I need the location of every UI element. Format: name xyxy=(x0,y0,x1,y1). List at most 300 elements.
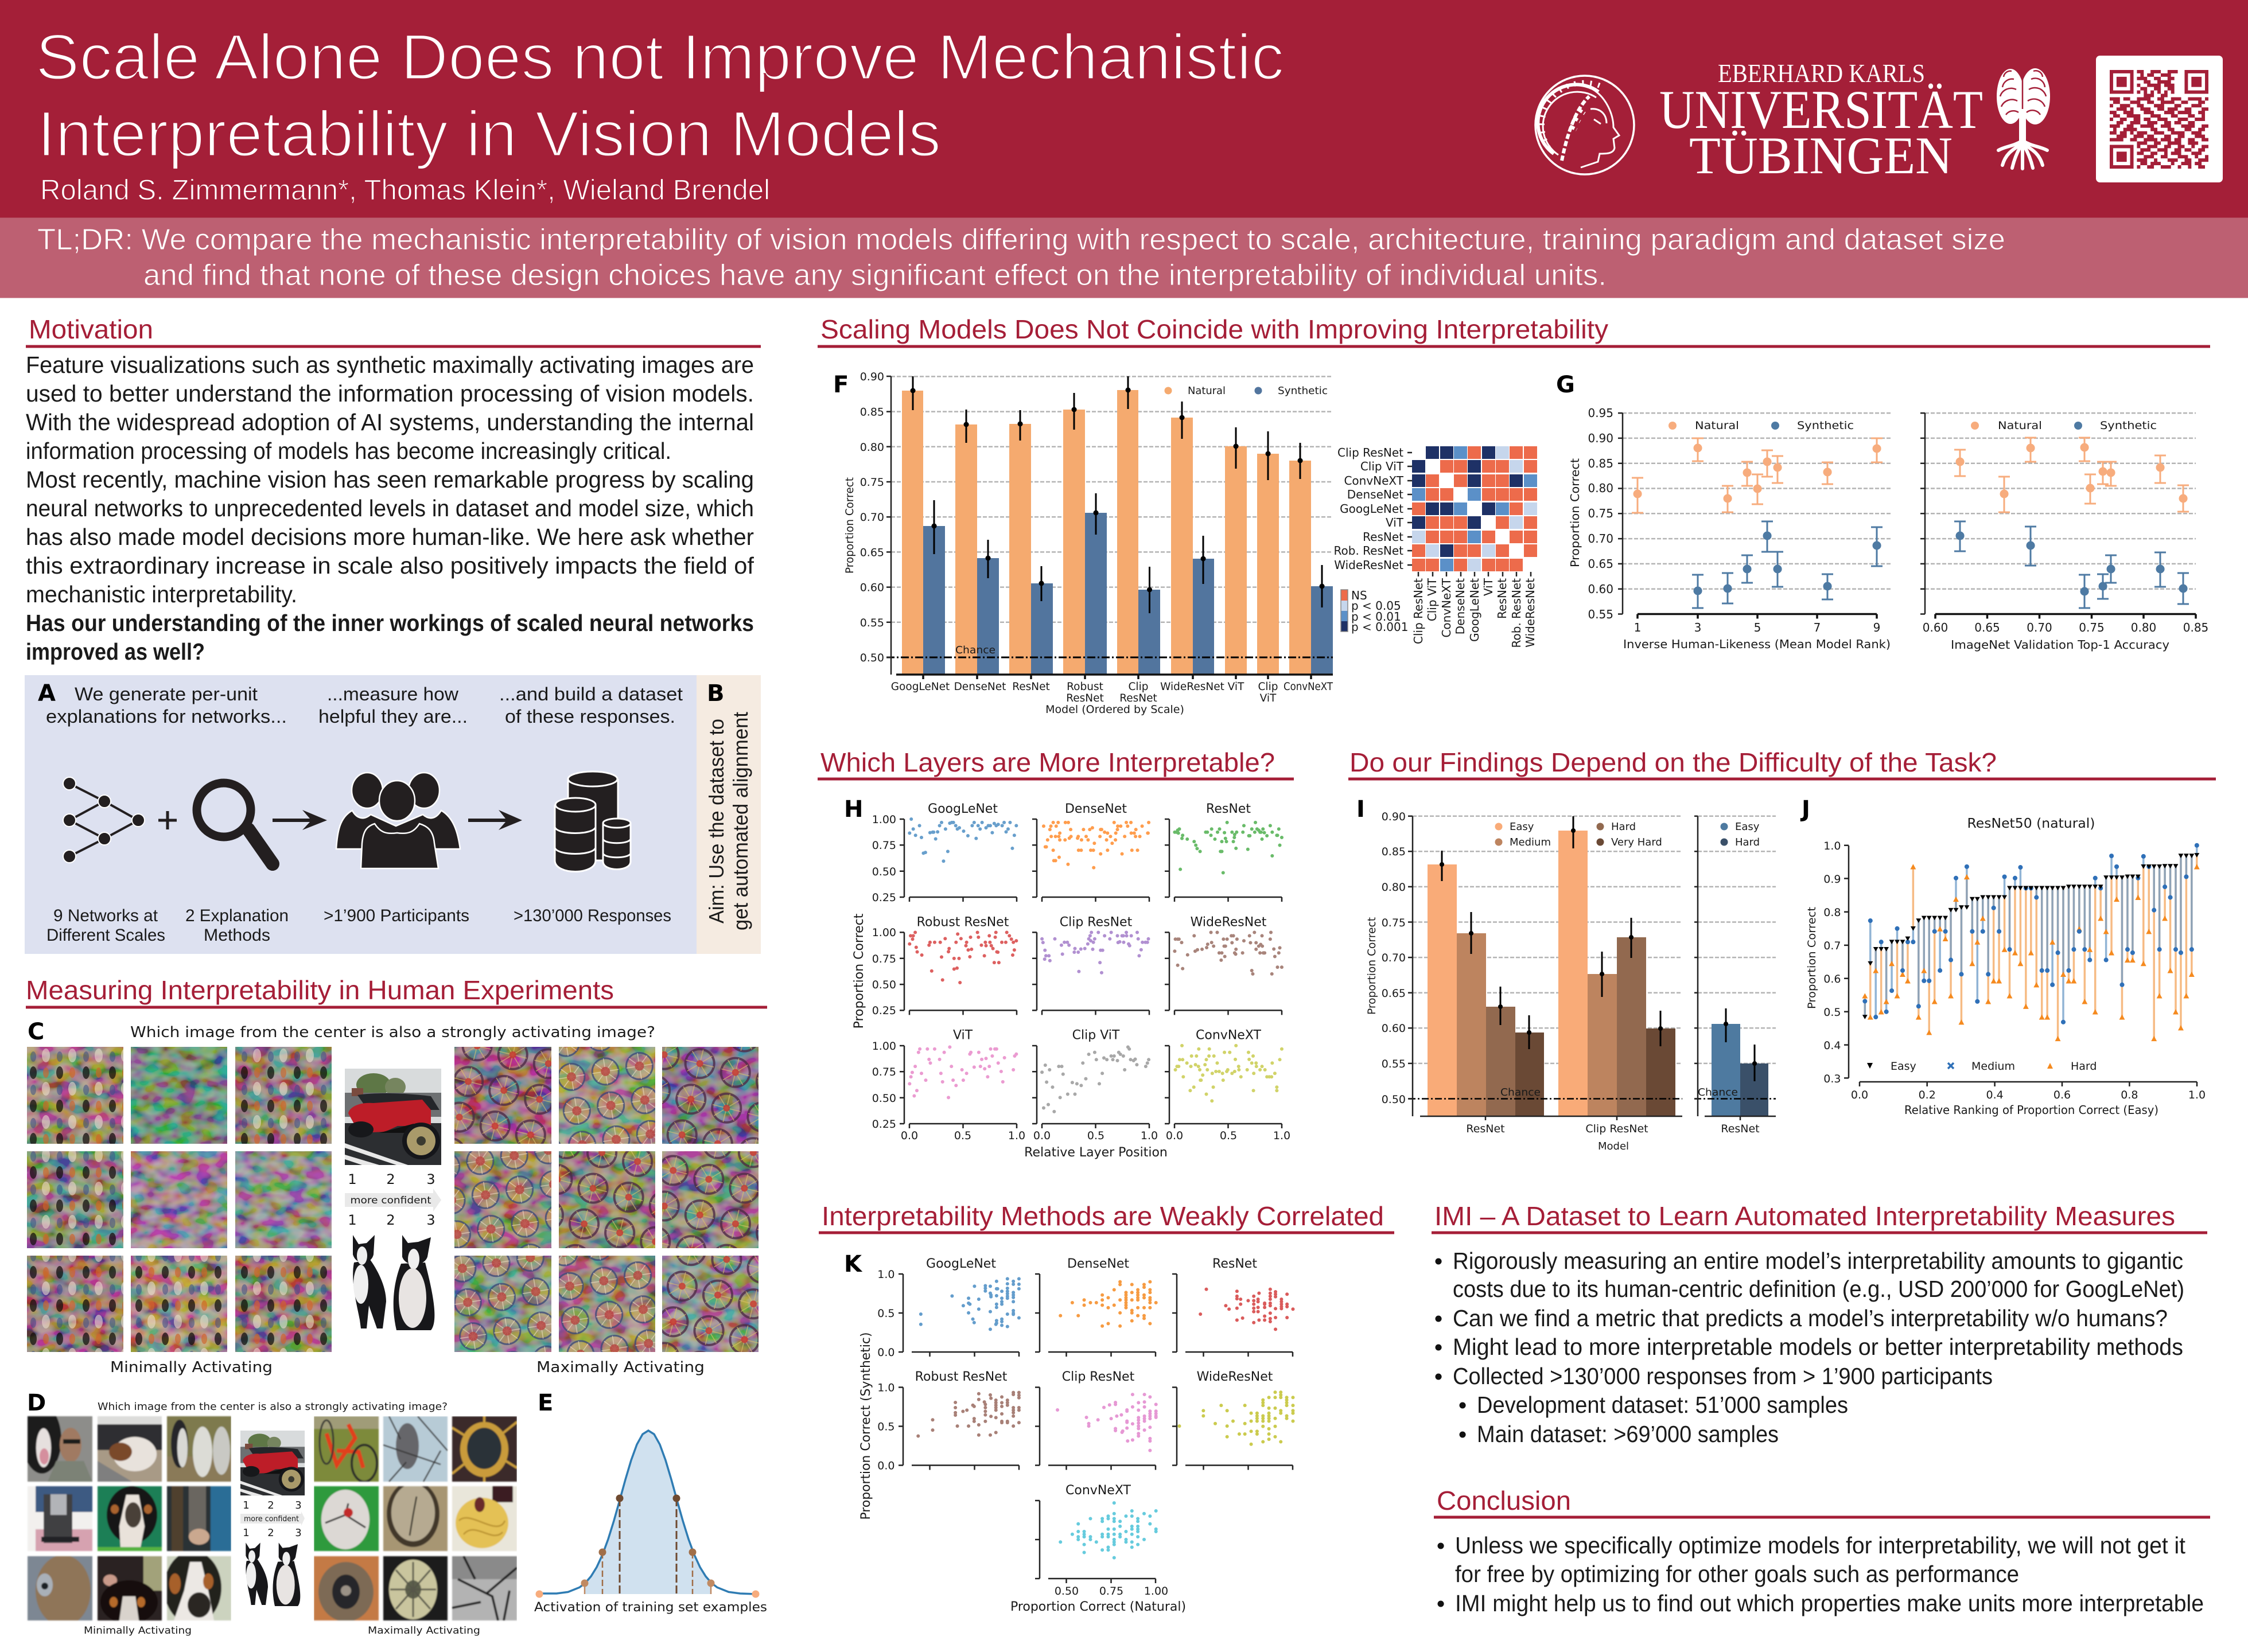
label J: J xyxy=(1800,796,1810,823)
image grid: maximally activating visualizations xyxy=(454,1047,759,1352)
tick labels and axis titles: 1 xyxy=(1634,621,1641,634)
center query images and confidence scale xyxy=(345,1069,441,1330)
label F: F xyxy=(833,372,849,398)
axis labels: 0.60 xyxy=(860,582,884,594)
center query images and confidence scale: 3 xyxy=(426,1171,435,1187)
tick labels: 0.50 xyxy=(872,979,896,991)
heading: Motivation: Motivation xyxy=(29,314,153,344)
heatmap column labels: Clip ResNet xyxy=(1411,578,1425,644)
subplot titles: DenseNet xyxy=(1065,802,1127,816)
tick labels and axis titles: 0.50 xyxy=(1055,1585,1079,1598)
scatter points xyxy=(909,819,1282,1112)
panel C: synthetic feature visualization task xyxy=(27,1019,759,1376)
IMI bullets: Development dataset: 51’000 samples xyxy=(1477,1392,1848,1418)
label H: H xyxy=(844,796,863,823)
QR code xyxy=(2096,56,2223,182)
tick labels and axis titles: 0.7 xyxy=(1823,940,1841,952)
tick labels and axis titles: 0.4 xyxy=(1823,1039,1841,1052)
tick labels and axis titles: 0.95 xyxy=(1588,406,1613,420)
tick labels and axis titles xyxy=(1806,840,2206,1117)
panel K: natural vs synthetic scatter xyxy=(844,1251,1293,1614)
tick labels: 0.25 xyxy=(872,1004,896,1017)
heatmap column labels: ResNet xyxy=(1495,578,1509,619)
tick labels and axis titles: 0.5 xyxy=(1823,1006,1841,1019)
center query images and confidence scale: 1 xyxy=(243,1499,250,1511)
tick labels: 1.00 xyxy=(872,813,896,826)
IMI bullets xyxy=(1438,1248,2184,1447)
center query images and confidence scale: 2 xyxy=(267,1499,274,1511)
conclusion bullets: IMI might help us to find out which properties make units more interpretable xyxy=(1455,1590,2204,1616)
tick labels and axis titles: 0.4 xyxy=(1986,1089,2004,1101)
legend: Easy xyxy=(1891,1060,1916,1073)
heatmap row labels: WideResNet xyxy=(1334,558,1403,572)
heatmap legend: NS xyxy=(1351,589,1367,602)
axis labels: 0.50 xyxy=(860,652,884,664)
captions: Minimally Activating xyxy=(110,1359,273,1376)
pipeline counts: 9 Networks at xyxy=(53,906,158,925)
icon: database cylinders xyxy=(555,772,631,872)
heatmap column labels xyxy=(1411,578,1537,648)
label D: D xyxy=(27,1390,46,1416)
tick labels and axis titles: 0.5 xyxy=(877,1420,895,1433)
pipeline captions: ...and build a dataset xyxy=(499,684,683,704)
tick labels and axis titles: 0.60 xyxy=(1588,582,1613,596)
motivation body text: mechanistic interpretability. xyxy=(26,581,297,607)
panel J: ResNet50 dumbbell chart xyxy=(1800,796,2206,1117)
heatmap legend: p < 0.05 xyxy=(1351,599,1401,613)
heatmap row labels: ResNet xyxy=(1363,530,1403,544)
bars: synthetic xyxy=(923,513,1333,675)
panel H: small-multiple scatter by layer xyxy=(844,796,1290,1160)
arrow: to dataset xyxy=(468,810,522,830)
captions: Maximally Activating xyxy=(368,1625,480,1637)
tick labels and axis titles xyxy=(859,1268,1186,1614)
pipeline counts: 2 Explanation xyxy=(185,906,289,925)
labels: Model xyxy=(1598,1140,1629,1152)
panel E: activation distribution xyxy=(534,1390,767,1615)
center query images and confidence scale: 2 xyxy=(386,1171,395,1187)
legends: Medium xyxy=(1510,836,1551,848)
captions: Maximally Activating xyxy=(536,1359,705,1376)
heatmap row labels: ConvNeXT xyxy=(1344,474,1404,488)
legend: Synthetic xyxy=(1797,419,1854,432)
legends: Easy xyxy=(1735,821,1760,833)
axes xyxy=(886,376,1333,679)
caption: Activation of training set examples xyxy=(534,1600,767,1615)
axis labels: ViT xyxy=(1228,681,1244,693)
tick labels and axis title: 0.80 xyxy=(2131,621,2156,634)
center query images and confidence scale: more confident xyxy=(244,1515,299,1524)
subplot titles: ConvNeXT xyxy=(1196,1028,1262,1043)
chance line xyxy=(1409,1086,1776,1099)
pipeline captions: of these responses. xyxy=(505,706,675,727)
labels: Clip ResNet xyxy=(1585,1123,1648,1135)
heatmap row labels: Rob. ResNet xyxy=(1334,544,1403,558)
axes xyxy=(1844,846,2197,1086)
tick labels and axis title: 0.60 xyxy=(1923,621,1948,634)
authors: Roland S. Zimmermann*, Thomas Klein*, Wieland Brendel xyxy=(40,174,770,206)
tick labels and axis titles: 1.0 xyxy=(2188,1089,2206,1101)
logo: university wordmark: EBERHARD KARLS xyxy=(1718,59,1925,88)
labels: 0.70 xyxy=(1382,952,1406,964)
IMI bullets: costs due to its human-centric definition (e.g., USD 200’000 for GoogLeNet) xyxy=(1453,1276,2184,1302)
motivation body text: improved as well? xyxy=(26,638,205,665)
tick labels: 0.0 xyxy=(1033,1129,1051,1142)
tick labels and axis titles: 9 xyxy=(1873,621,1880,634)
subplot titles: WideResNet xyxy=(1191,915,1267,929)
tick labels: 1.0 xyxy=(1273,1129,1290,1142)
tick labels and axis titles: 5 xyxy=(1754,621,1761,634)
axis titles: Relative Layer Position xyxy=(1024,1146,1168,1160)
tick labels and axis titles: Proportion Correct (Natural) xyxy=(1010,1600,1186,1614)
subplot titles: GoogLeNet xyxy=(926,1257,996,1271)
axis labels: GoogLeNet xyxy=(891,681,950,693)
motivation body text: used to better understand the information processing of vision models. xyxy=(26,380,754,407)
label K: K xyxy=(844,1251,863,1277)
axis titles: Proportion Correct xyxy=(852,913,866,1028)
heatmap row labels: GoogLeNet xyxy=(1340,502,1403,516)
motivation body text: Feature visualizations such as synthetic maximally activating images are xyxy=(26,352,754,378)
tick labels and axis titles: 0.55 xyxy=(1588,607,1613,621)
axis labels: 0.80 xyxy=(860,441,884,454)
tick labels: 0.5 xyxy=(1087,1129,1104,1142)
labels: 0.55 xyxy=(1382,1058,1406,1070)
error bars xyxy=(1442,816,1755,1081)
labels: ResNet xyxy=(1466,1123,1505,1135)
markers: easy xyxy=(1862,853,2199,1019)
IMI bullets: Can we find a metric that predicts a model’s interpretability w/o humans? xyxy=(1453,1305,2168,1331)
heatmap legend xyxy=(1341,589,1408,634)
conclusion bullets: Unless we specifically optimize models for interpretability, we will not get it xyxy=(1455,1532,2186,1559)
panel I: difficulty bars xyxy=(1356,796,1776,1152)
tick labels and axis titles: 0.85 xyxy=(1588,457,1613,470)
IMI bullets: Might lead to more interpretable models or better interpretability methods xyxy=(1453,1334,2183,1360)
legends: Hard xyxy=(1735,836,1760,848)
heatmap row labels xyxy=(1334,446,1404,572)
heatmap column labels: GoogLeNet xyxy=(1468,578,1481,642)
motivation body text: neural networks to unprecedented levels in dataset and model size, which xyxy=(26,495,754,521)
axis labels: 0.75 xyxy=(860,476,884,489)
labels: 0.80 xyxy=(1382,881,1406,894)
center query images and confidence scale: 1 xyxy=(243,1527,250,1539)
tick labels: 1.00 xyxy=(872,926,896,939)
tick labels: 0.50 xyxy=(872,866,896,878)
logo: university wordmark xyxy=(1659,59,1983,185)
legend: Natural xyxy=(1998,419,2042,432)
heatmap column labels: ViT xyxy=(1481,578,1495,596)
heading: Scaling Models: Scaling Models Does Not Coincide with Improving Interpretability xyxy=(820,314,1608,344)
subplot titles: ViT xyxy=(953,1028,973,1043)
title: Scale Alone Does not Improve Mechanistic xyxy=(36,21,1284,93)
tick labels and axis titles: 1.0 xyxy=(1823,840,1841,852)
subplot titles: ResNet xyxy=(1206,802,1251,816)
tick labels and axis title: 0.65 xyxy=(1974,621,2000,634)
header banner xyxy=(0,0,2248,218)
center query images and confidence scale: 3 xyxy=(426,1212,435,1228)
image grid: minimally activating visualizations xyxy=(27,1047,332,1352)
tick labels: 0.5 xyxy=(954,1129,971,1142)
points: natural xyxy=(1632,438,1883,513)
subplot titles: GoogLeNet xyxy=(928,802,998,816)
question: Which image from the center is also a strongly activating image? xyxy=(130,1024,655,1041)
subplot titles: Clip ResNet xyxy=(1060,915,1133,929)
labels: 0.85 xyxy=(1382,846,1406,858)
axis labels: WideResNet xyxy=(1160,681,1224,693)
conclusion bullets: for free by optimizing for other goals such as performance xyxy=(1455,1561,2019,1587)
heatmap row labels: Clip ResNet xyxy=(1337,446,1403,459)
legends: Very Hard xyxy=(1611,836,1662,848)
axis labels: Clip xyxy=(1129,681,1148,693)
tick labels and axis titles: 3 xyxy=(1694,621,1701,634)
icon: network xyxy=(63,777,145,863)
panel D: natural exemplar task xyxy=(22,1390,517,1637)
axis labels: Model (Ordered by Scale) xyxy=(1045,703,1184,716)
tick labels and axis titles: Proportion Correct xyxy=(1568,458,1582,567)
tick labels and axis titles xyxy=(1568,406,1891,651)
legend: Medium xyxy=(1971,1060,2015,1073)
axis labels: 0.85 xyxy=(860,406,884,419)
label C: C xyxy=(28,1019,44,1045)
TL;DR band: and find that none of these design choices have any significant effect on the interpretability of individual units. xyxy=(143,259,1607,292)
panel: IMI dataset xyxy=(1432,1201,2207,1447)
tick labels and axis titles: 0.65 xyxy=(1588,557,1613,571)
chance line: Chance xyxy=(1500,1086,1541,1098)
axis labels: Proportion Correct xyxy=(843,477,856,574)
tick labels: 0.5 xyxy=(1220,1129,1237,1142)
legends: Easy xyxy=(1510,821,1534,833)
heading: Interpretability Methods: Interpretability Methods are Weakly Correlated xyxy=(822,1201,1384,1231)
markers: medium xyxy=(1865,846,2197,1022)
legend: Synthetic xyxy=(1278,385,1328,397)
pipeline captions xyxy=(46,684,683,727)
tick labels and axis titles: 0.8 xyxy=(2121,1089,2138,1101)
center query images and confidence scale: 2 xyxy=(386,1212,395,1228)
motivation body text: has also made model decisions more human-like. We here ask whether xyxy=(26,524,754,550)
tick labels and axis titles: 0.75 xyxy=(1099,1585,1123,1598)
subplot titles: DenseNet xyxy=(1067,1257,1129,1271)
tick labels and axis titles: 0.6 xyxy=(2053,1089,2071,1101)
axis labels: Robust xyxy=(1067,681,1103,693)
captions xyxy=(84,1625,480,1637)
panel A: experiment pipeline xyxy=(25,675,697,954)
heatmap column labels: Clip ViT xyxy=(1425,578,1439,621)
center query images and confidence scale: more confident xyxy=(350,1195,431,1206)
labels: Proportion Correct xyxy=(1366,917,1378,1015)
pipeline counts: >1’900 Participants xyxy=(324,906,469,925)
tick labels and axis titles: 0.0 xyxy=(877,1459,895,1472)
axis labels: DenseNet xyxy=(954,681,1006,693)
label E: E xyxy=(538,1390,553,1416)
chart title: ResNet50 (natural) xyxy=(1967,815,2095,831)
photo grid: minimally activating xyxy=(22,1405,231,1626)
points: synthetic xyxy=(1954,521,2189,608)
axis labels: 0.70 xyxy=(860,511,884,524)
legend xyxy=(1669,419,1854,432)
chart: gaussian xyxy=(536,1431,760,1598)
labels: 0.50 xyxy=(1382,1093,1406,1106)
axes xyxy=(900,819,1282,1128)
pipeline counts: >130’000 Responses xyxy=(514,906,671,925)
tick labels and axis titles: 0.3 xyxy=(1823,1073,1841,1085)
tick labels: 0.0 xyxy=(901,1129,918,1142)
markers: hard xyxy=(1862,864,2200,1041)
legend: Natural xyxy=(1188,385,1226,397)
labels xyxy=(1366,811,1760,1152)
logo: Minerva seal xyxy=(1535,76,1634,174)
tick labels: 1.00 xyxy=(872,1040,896,1053)
scatter points xyxy=(918,1279,1293,1558)
heading: Measuring Interpretability: Measuring Interpretability in Human Experiments xyxy=(26,975,614,1005)
tick labels and axis titles: 7 xyxy=(1814,621,1821,634)
label B: B xyxy=(707,680,724,707)
tick labels and axis titles: 0.2 xyxy=(1919,1089,1936,1101)
pipeline captions: ...measure how xyxy=(327,684,459,704)
center query images and confidence scale xyxy=(240,1431,305,1606)
pipeline captions: explanations for networks... xyxy=(46,706,287,727)
tick labels and axis title: ImageNet Validation Top-1 Accuracy xyxy=(1951,638,2169,652)
heatmap row labels: DenseNet xyxy=(1347,488,1403,501)
aim text: get automated alignment xyxy=(729,712,752,930)
data series xyxy=(1862,846,2200,1041)
axis titles xyxy=(852,913,1168,1160)
motivation body text: this extraordinary increase in scale also positively impacts the field of xyxy=(26,552,754,579)
TL;DR band xyxy=(0,218,2248,298)
chance line: Chance xyxy=(1698,1086,1738,1098)
tick labels and axis titles: 1.00 xyxy=(1144,1585,1168,1598)
legend: Hard xyxy=(2071,1060,2097,1073)
labels: 0.60 xyxy=(1382,1022,1406,1035)
tick labels and axis titles: 0.80 xyxy=(1588,481,1613,495)
heatmap row labels: ViT xyxy=(1386,516,1404,529)
legend xyxy=(1165,385,1328,397)
tick labels and axis title: 0.70 xyxy=(2027,621,2052,634)
aim text xyxy=(705,712,752,930)
tick labels: 0.75 xyxy=(872,953,896,965)
points: synthetic xyxy=(1692,521,1883,608)
tick labels and axis titles: 0.5 xyxy=(877,1307,895,1320)
title xyxy=(36,21,1284,170)
subplot titles: ConvNeXT xyxy=(1065,1483,1131,1498)
tick labels and axis titles: 0.0 xyxy=(877,1346,895,1359)
pipeline counts: Different Scales xyxy=(46,926,165,945)
question: Which image from the center is also a strongly activating image? xyxy=(98,1401,448,1413)
tick labels and axis titles: 0.70 xyxy=(1588,532,1613,546)
tick labels and axis titles: Relative Ranking of Proportion Correct (Easy) xyxy=(1904,1103,2158,1117)
tick labels and axis title xyxy=(1923,621,2208,652)
tick labels xyxy=(872,813,1290,1142)
axis labels: ViT xyxy=(1260,692,1277,704)
tick labels: 1.0 xyxy=(1008,1129,1025,1142)
heatmap legend: p < 0.001 xyxy=(1351,620,1408,634)
IMI bullets: Main dataset: >69’000 samples xyxy=(1477,1421,1779,1447)
tick labels and axis titles: 0.8 xyxy=(1823,906,1841,919)
conclusion bullets xyxy=(1441,1532,2204,1616)
center query images and confidence scale: 1 xyxy=(348,1171,357,1187)
labels: ResNet xyxy=(1721,1123,1760,1135)
legend: Natural xyxy=(1695,419,1739,432)
labels: 0.90 xyxy=(1382,811,1406,823)
arrow: to participants xyxy=(273,810,327,830)
tick labels: 0.25 xyxy=(872,891,896,904)
logo: tree xyxy=(1997,68,2050,169)
tick labels and axis title: 0.85 xyxy=(2183,621,2208,634)
tick labels and axis titles: 0.6 xyxy=(1823,973,1841,985)
motivation body text: Has our understanding of the inner workings of scaled neural networks xyxy=(26,610,754,636)
logo: university wordmark: TÜBINGEN xyxy=(1689,126,1953,185)
subplot titles: Clip ViT xyxy=(1072,1028,1120,1043)
heatmap row labels: Clip ViT xyxy=(1360,459,1404,473)
motivation body text xyxy=(26,352,754,665)
panel: motivation xyxy=(26,314,761,665)
subplot titles xyxy=(915,1257,1273,1498)
legends: Hard xyxy=(1611,821,1636,833)
tick labels: 0.75 xyxy=(872,1066,896,1078)
tick labels and axis titles: 1.0 xyxy=(877,1268,895,1281)
axis labels: ResNet xyxy=(1066,692,1104,704)
tick labels: 1.0 xyxy=(1141,1129,1158,1142)
panel F: bar chart by model xyxy=(833,371,1537,716)
label I: I xyxy=(1356,796,1365,823)
pipeline counts xyxy=(46,906,671,945)
center query images and confidence scale: 2 xyxy=(267,1527,274,1539)
photo grid: maximally activating xyxy=(314,1416,517,1622)
legend xyxy=(1867,1060,2097,1073)
axes xyxy=(899,1274,1293,1583)
heatmap column labels: ConvNeXT xyxy=(1440,578,1453,638)
heading: IMI: IMI – A Dataset to Learn Automated Interpretability Measures xyxy=(1434,1201,2175,1231)
label A: A xyxy=(38,680,56,707)
subplot titles: Robust ResNet xyxy=(915,1370,1008,1384)
TL;DR band: TL;DR: We compare the mechanistic interpretability of vision models differing with respect to scale, architecture, training paradigm and dataset size xyxy=(37,223,2005,256)
subplot titles xyxy=(917,802,1267,1043)
chance line: Chance xyxy=(955,644,995,656)
tick labels and axis titles: Proportion Correct xyxy=(1806,907,1818,1009)
axes xyxy=(1408,816,1776,1120)
axis labels: Clip xyxy=(1258,681,1278,693)
heading: Do our Findings: Do our Findings Depend on the Difficulty of the Task? xyxy=(1349,747,1997,777)
axis labels xyxy=(843,371,1333,716)
center query images and confidence scale: 3 xyxy=(295,1527,302,1539)
icon: people xyxy=(336,773,460,868)
tick labels and axis titles: 0.75 xyxy=(1588,506,1613,520)
heatmap column labels: Rob. ResNet xyxy=(1510,578,1523,648)
icon: plus xyxy=(158,811,177,829)
subplot titles: Robust ResNet xyxy=(917,915,1009,929)
pipeline counts: Methods xyxy=(204,926,270,945)
axis labels: 0.65 xyxy=(860,546,884,559)
legend xyxy=(1971,419,2157,432)
title: Interpretability in Vision Models xyxy=(37,98,941,170)
heading: Which Layers: Which Layers are More Interpretable? xyxy=(820,747,1275,777)
labels: 0.65 xyxy=(1382,987,1406,1000)
logo: university wordmark: UNIVERSITÄT xyxy=(1659,79,1983,140)
aim text: Aim: Use the dataset to xyxy=(705,719,728,924)
tick labels: 0.25 xyxy=(872,1118,896,1131)
tick labels and axis titles: 1.0 xyxy=(877,1381,895,1394)
center query images and confidence scale: 1 xyxy=(348,1212,357,1228)
bars: natural xyxy=(902,390,1311,675)
icon: magnifier xyxy=(197,783,273,864)
pipeline captions: We generate per-unit xyxy=(75,684,258,704)
grid xyxy=(891,376,1333,622)
points: natural xyxy=(1954,438,2189,512)
motivation body text: With the widespread adoption of AI systems, understanding the internal xyxy=(26,409,754,435)
significance heatmap xyxy=(1334,446,1537,648)
axis labels: ResNet xyxy=(1119,692,1157,704)
panel: conclusion xyxy=(1434,1486,2210,1616)
captions: Minimally Activating xyxy=(84,1625,192,1637)
subplot titles: ResNet xyxy=(1212,1257,1257,1271)
